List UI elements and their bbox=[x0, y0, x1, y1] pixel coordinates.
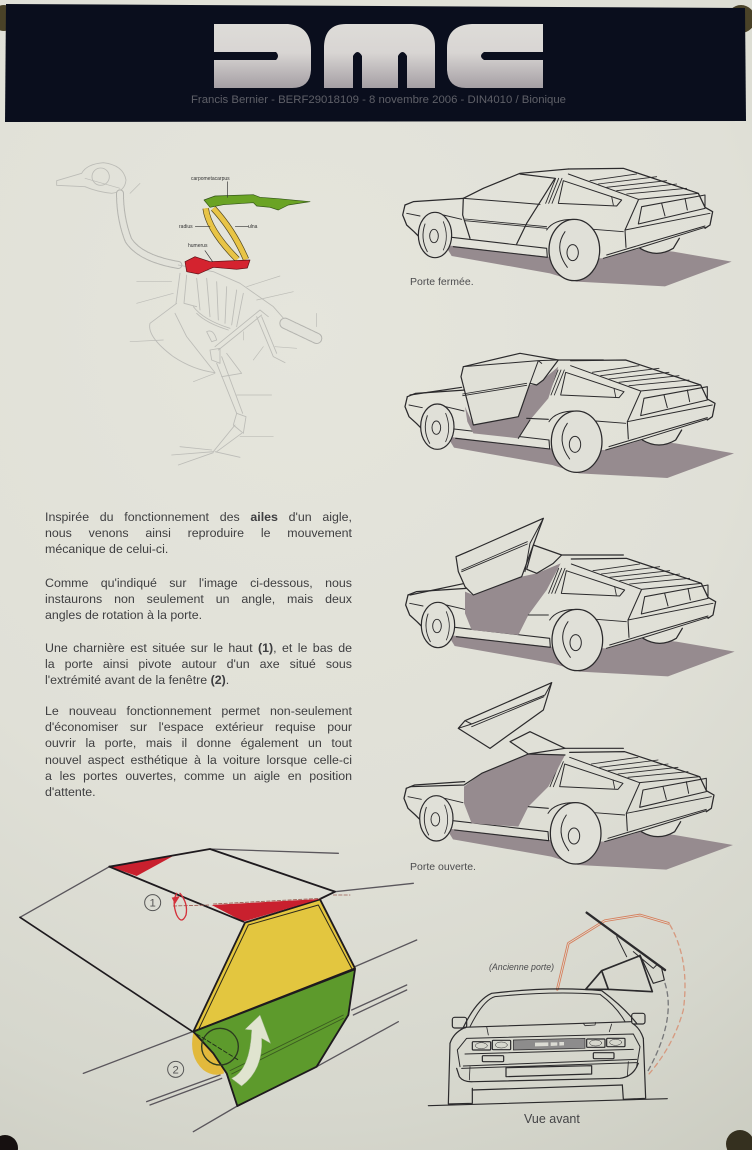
paragraph 3: la porte ainsi pivote autour d'un axe situé sous bbox=[45, 657, 352, 671]
wing: carpometacarpus green bbox=[204, 195, 310, 210]
label ulna: ulna bbox=[248, 224, 258, 230]
paragraph 3: Une charnière est située sur le haut (1), et le bas de bbox=[45, 641, 352, 655]
paragraph 3 bbox=[45, 641, 352, 687]
brass pin top left bbox=[0, 5, 17, 31]
car body bbox=[428, 989, 667, 1106]
paragraph 3: l'extrémité avant de la fenêtre (2). bbox=[45, 673, 229, 687]
paragraph 4: a les portes ouvertes, comme un aigle en position bbox=[45, 769, 352, 783]
faint leader lines bbox=[130, 183, 317, 437]
label carpometacarpus: carpometacarpus bbox=[191, 176, 230, 182]
red hinge triangle 1 bbox=[110, 855, 175, 876]
rotation axis 1 bbox=[173, 895, 350, 906]
paragraph 1 bbox=[45, 510, 352, 556]
car: door fully open bbox=[404, 683, 733, 870]
wing: humerus red bbox=[185, 257, 250, 274]
paragraph 2: angles de rotation à la porte. bbox=[45, 608, 202, 622]
wing leader lines bbox=[195, 182, 248, 262]
car: door closed bbox=[403, 168, 732, 286]
bird skeleton diagram bbox=[57, 163, 317, 465]
car: door half raised bbox=[406, 518, 735, 676]
door hinge diagram bbox=[20, 849, 417, 1132]
paragraph 4: nouvel aspect esthétique à la voiture lorsque celle-ci bbox=[45, 753, 352, 767]
old door in orange bbox=[557, 915, 685, 1077]
wing: radius and ulna yellow bbox=[206, 208, 246, 259]
curved arrow bbox=[232, 1015, 271, 1086]
header credit line: Francis Bernier - BERF29018109 - 8 novembre 2006 - DIN4010 / Bionique bbox=[191, 94, 566, 106]
caption: vue avant: Vue avant bbox=[524, 1112, 580, 1126]
lower door panel green bbox=[193, 969, 355, 1106]
caption: porte fermée: Porte fermée. bbox=[410, 276, 474, 288]
upper door panel yellow bbox=[193, 899, 355, 1032]
paragraph 4: d'économiser sur l'espace extérieur requise pour bbox=[45, 720, 352, 734]
grey skeleton bbox=[57, 163, 317, 465]
red hinge triangle 2 bbox=[212, 899, 320, 922]
hinge 2 yellow lobe bbox=[192, 1033, 224, 1075]
paragraph 4: ouvrir la porte, mais il donne également un tout bbox=[45, 736, 352, 750]
roof outline bbox=[20, 849, 335, 1032]
header banner bbox=[5, 4, 746, 122]
label humerus: humerus bbox=[188, 243, 208, 249]
rotation axis 2 circle bbox=[202, 1028, 238, 1065]
number 1 bbox=[145, 895, 161, 911]
path of new door dashed bbox=[647, 983, 668, 1073]
paragraph 2 bbox=[45, 576, 352, 622]
new door raised bbox=[586, 913, 665, 992]
yellow panel inner line bbox=[198, 905, 352, 1030]
paragraph 1: Inspirée du fonctionnement des ailes d'un aigle, bbox=[45, 510, 352, 524]
green panel inner line bbox=[230, 1015, 343, 1074]
front view of car bbox=[428, 913, 685, 1106]
label radius: radius bbox=[179, 224, 193, 230]
caption: ancienne porte: (Ancienne porte) bbox=[489, 962, 554, 972]
car: door slightly open bbox=[405, 353, 734, 478]
paragraph 1: nous venons ainsi reproduire le mouvement bbox=[45, 526, 352, 540]
number 1: 1 bbox=[150, 898, 156, 910]
paragraph 4 bbox=[45, 704, 352, 799]
caption: porte ouverte: Porte ouverte. bbox=[410, 861, 476, 873]
number 2: 2 bbox=[173, 1064, 179, 1076]
paragraph 1: mécanique de celui-ci. bbox=[45, 542, 168, 556]
paragraph 2: instaurons non seulement un angle, mais deux bbox=[45, 592, 352, 606]
brass pin bottom left bbox=[0, 1135, 18, 1150]
logo: DMC bbox=[214, 24, 543, 88]
number 2 bbox=[168, 1061, 184, 1077]
paragraph 4: d'attente. bbox=[45, 785, 96, 799]
rotation icon red bbox=[174, 893, 187, 920]
paragraph 2: Comme qu'indiqué sur l'image ci-dessous, nous bbox=[45, 576, 352, 590]
faded guide lines bbox=[20, 849, 417, 1132]
brass pin bottom right bbox=[726, 1130, 752, 1150]
brass pin top right bbox=[727, 5, 752, 33]
paragraph 4: Le nouveau fonctionnement permet non-seulement bbox=[45, 704, 352, 718]
